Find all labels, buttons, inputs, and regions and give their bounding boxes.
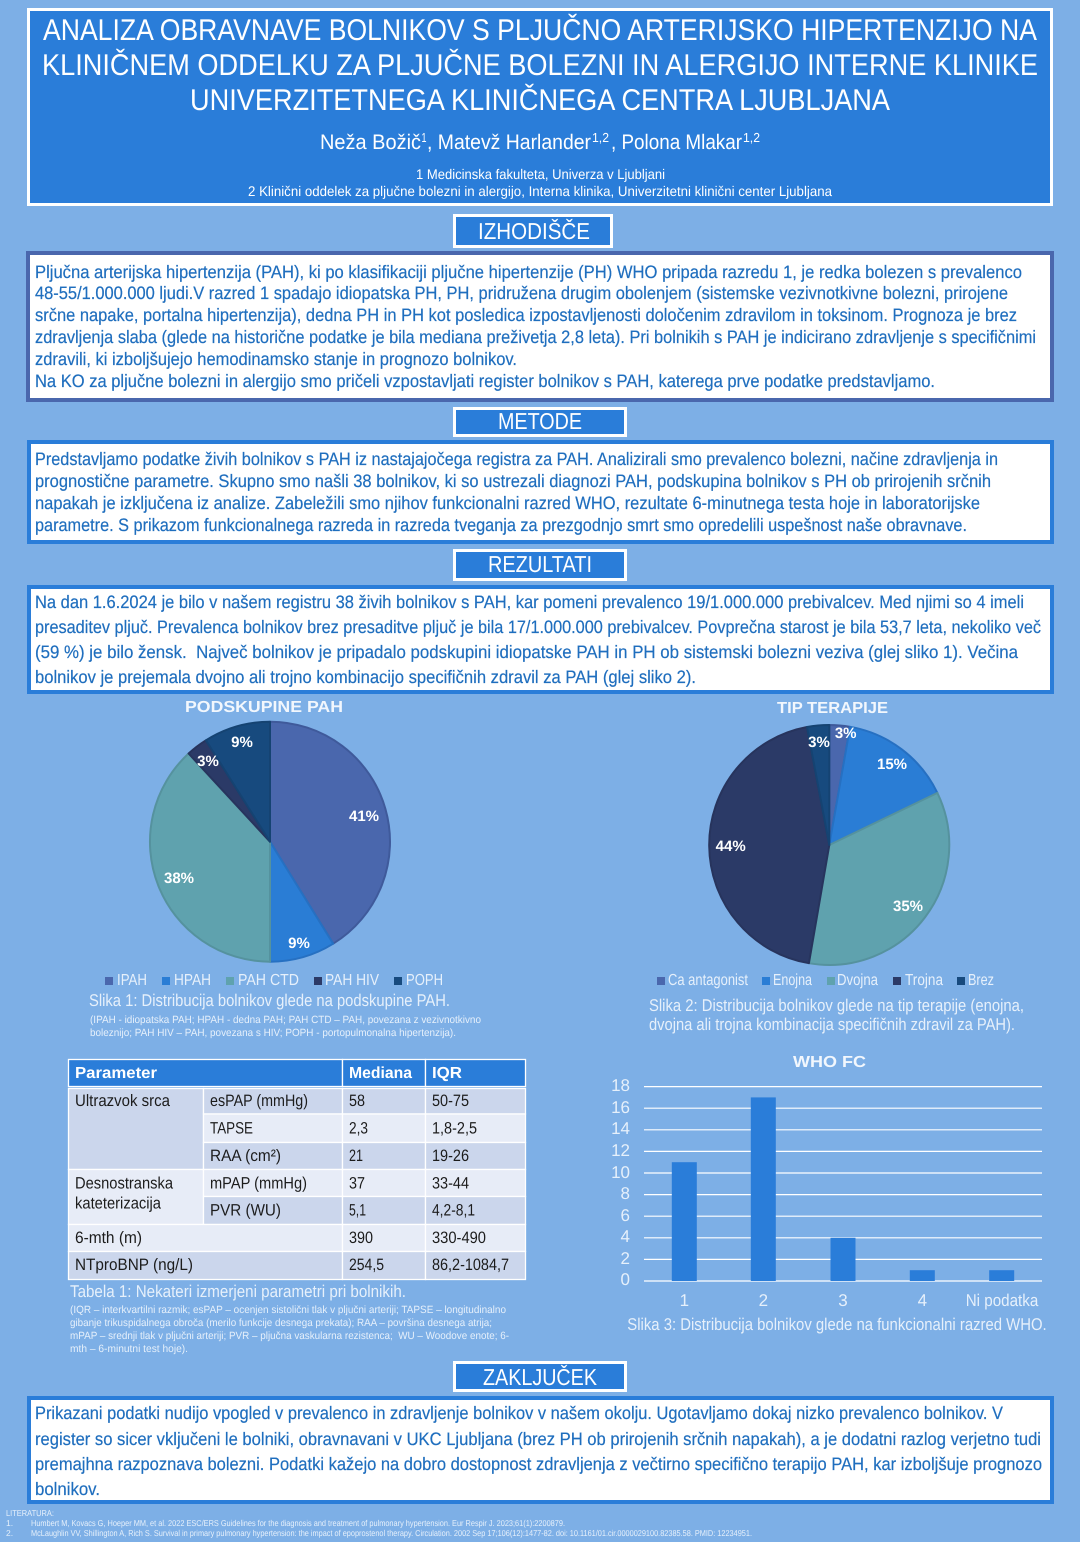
title: UNIVERZITETNEGA KLINIČNEGA CENTRA LJUBLJANA xyxy=(190,83,890,117)
table body text: 1,8-2,5 xyxy=(432,1120,477,1138)
panel: rezultati text: (59 %) je bilo žensk. Največ bolnikov je pripadalo podskupini idiopatske PAH in PH ob sistemski bolezni veziva (glej sliko 1). Večina xyxy=(35,642,1019,662)
caption: slika 1: (IPAH - idiopatska PAH; HPAH - dedna PAH; PAH CTD – PAH, povezana z vezivnotkivno xyxy=(90,1014,481,1026)
pie value labels: 44% xyxy=(716,838,746,855)
chart: WHO FC bar chart xyxy=(611,1054,1042,1310)
pie value labels: 35% xyxy=(893,898,923,915)
y axis labels: 8 xyxy=(621,1184,630,1203)
pie value labels: 41% xyxy=(349,808,379,825)
authors xyxy=(320,130,760,154)
pie legend: IPAH xyxy=(117,972,147,989)
panel: metode text xyxy=(29,442,1052,542)
bars xyxy=(672,1097,1014,1281)
pie legend: Ca antagonist xyxy=(668,972,748,989)
x axis labels: 1 xyxy=(680,1291,689,1310)
table header text: IQR xyxy=(432,1065,462,1082)
affiliations: 1 Medicinska fakulteta, Univerza v Ljubljani xyxy=(416,166,665,182)
pie legend: PAH CTD xyxy=(238,972,299,989)
pie value labels: 9% xyxy=(231,734,253,751)
caption: tabela 1: mPAP – srednji tlak v pljučni arteriji; PVR – pljučna vaskularna rezistenca; WU – Woodove enote; 6- xyxy=(70,1330,509,1342)
pie slices xyxy=(150,722,390,962)
caption: slika 1: boleznijo; PAH HIV – PAH, povezana s HIV; POPH - portopulmonalna hipertenzija). xyxy=(90,1027,456,1039)
references: Humbert M, Kovacs G, Hoeper MM, et al. 2022 ESC/ERS Guidelines for the diagnosis and treatment of pulmonary hypertension. Eur Respir J. 2023;61(1):2200879. xyxy=(31,1518,565,1528)
chart: tip terapije pie xyxy=(657,700,994,989)
table body text: TAPSE xyxy=(210,1120,253,1138)
pie legend xyxy=(657,972,994,989)
panel: rezultati text: bolnikov je prejemala dvojno ali trojno kombinacijo specifičnih zdravil za PAH (glej sliko 2). xyxy=(35,667,696,687)
table header text: Mediana xyxy=(349,1065,412,1082)
table body text: NTproBNP (ng/L) xyxy=(75,1256,193,1274)
panel: izhodišče text: Pljučna arterijska hipertenzija (PAH), ki po klasifikaciji pljučne hipertenzije (PH) WHO pripada razredu 1, je redka bolezen s prevalenco xyxy=(35,262,1022,282)
x axis labels: 4 xyxy=(918,1291,927,1310)
pie value labels: 38% xyxy=(164,870,194,887)
pie legend xyxy=(105,972,443,989)
table body text: 6-mth (m) xyxy=(75,1229,142,1247)
pie legend: Trojna xyxy=(905,972,943,989)
table body text: 19-26 xyxy=(432,1147,469,1165)
authors: 1 xyxy=(422,130,426,145)
heading: metode: METODE xyxy=(498,408,582,434)
table body text: 254,5 xyxy=(349,1256,384,1274)
pie value labels: 3% xyxy=(808,734,830,751)
pie value labels: 3% xyxy=(835,725,857,742)
authors: , Polona Mlakar xyxy=(611,131,742,154)
chart title: WHO FC xyxy=(793,1054,867,1071)
table cells xyxy=(68,1060,526,1280)
pie legend: Brez xyxy=(968,972,994,989)
caption: slika 1: Slika 1: Distribucija bolnikov glede na podskupine PAH. xyxy=(89,991,450,1010)
panel: zaključek text: bolnikov. xyxy=(35,1479,100,1499)
heading: rezultati xyxy=(454,550,626,580)
caption: slika 1 xyxy=(89,991,481,1039)
panel: rezultati text xyxy=(29,587,1052,692)
table body text: mPAP (mmHg) xyxy=(210,1174,307,1192)
references: LITERATURA: xyxy=(6,1508,54,1518)
panel: metode text: prognostične parametre. Skupno smo našli 38 bolnikov, ki so ustrezali diagnozi PAH, podskupina bolnikov s PH ob prirojenih srčnih xyxy=(35,471,991,491)
references: 1. xyxy=(6,1518,13,1528)
pie value labels xyxy=(164,734,379,952)
panel: izhodišče text xyxy=(28,253,1052,400)
table body text: 50-75 xyxy=(432,1092,469,1110)
table body text: 37 xyxy=(349,1174,365,1192)
caption: tabela 1 xyxy=(70,1282,509,1355)
table body text: 390 xyxy=(349,1229,373,1247)
table body text: PVR (WU) xyxy=(210,1202,281,1220)
y axis labels: 10 xyxy=(611,1163,630,1182)
table header text xyxy=(75,1065,462,1082)
heading: rezultati: REZULTATI xyxy=(488,551,592,577)
caption: slika 2 xyxy=(649,996,1024,1034)
pie value labels: 9% xyxy=(288,935,310,952)
panel: zaključek text xyxy=(29,1398,1052,1502)
table body text: esPAP (mmHg) xyxy=(210,1092,308,1110)
table body text: 33-44 xyxy=(432,1174,469,1192)
panel: zaključek text: Prikazani podatki nudijo vpogled v prevalenco in zdravljenje bolnikov v našem okolju. Ugotavljamo dokaj nizko prevalenco bolnikov. V xyxy=(35,1403,1003,1423)
pie legend: PAH HIV xyxy=(325,972,379,989)
references: McLaughlin VV, Shillington A, Rich S. Survival in primary pulmonary hypertension: the impact of epoprostenol therapy. Circulation. 2002 Sep 17;106(12):1477-82. doi: 10.1161/01.cir.0000029100.82385.58. PMID: 12234951. xyxy=(31,1528,752,1538)
authors: , Matevž Harlander xyxy=(427,131,591,154)
pie value labels: 15% xyxy=(877,756,907,773)
pie value labels xyxy=(716,725,923,915)
table body text: Desnostranska xyxy=(75,1174,174,1192)
panel: metode text: napakah je izključena iz analize. Zabeležili smo njihov funkcionalni razred WHO, rezultate 6-minutnega testa hoje in laboratorijske xyxy=(35,493,980,513)
panel: metode text: parametre. S prikazom funkcionalnega razreda in razreda tveganja za prezgodnjo smrt smo opredelili uspešnost naše obravnave. xyxy=(35,515,967,535)
x axis labels xyxy=(680,1291,1039,1310)
pie legend: Dvojna xyxy=(837,972,878,989)
heading: izhodišče xyxy=(454,216,612,246)
y axis labels: 2 xyxy=(621,1249,630,1268)
y axis labels: 12 xyxy=(611,1141,630,1160)
authors: 1,2 xyxy=(743,130,760,145)
panel: izhodišče text: srčne napake, portalna hipertenzija), dedna PH in PH kot posledica izpostavljenosti določenim zdravilom in toksinom. Prognoza je brez xyxy=(35,305,1017,325)
table header text: Parameter xyxy=(75,1065,157,1082)
affiliations xyxy=(248,166,832,199)
y axis labels xyxy=(611,1076,630,1289)
panel: izhodišče text: 48-55/1.000.000 ljudi.V razred 1 spadajo idiopatska PH, PH, pridružena drugim obolenjem (sistemske vezivnotkivne bolezni, prirojene xyxy=(35,283,1008,303)
x axis labels: 3 xyxy=(838,1291,848,1310)
title banner xyxy=(28,10,1052,204)
x axis labels: 2 xyxy=(759,1291,768,1310)
table body text: 86,2-1084,7 xyxy=(432,1256,509,1274)
caption: slika 2: dvojna ali trojna kombinacija specifičnih zdravil za PAH). xyxy=(649,1015,1015,1034)
pie value labels: 3% xyxy=(197,753,219,770)
panel: metode text: Predstavljamo podatke živih bolnikov s PAH iz nastajajočega registra za PAH. Analizirali smo prevalenco bolezni, načine zdravljenja in xyxy=(35,449,998,469)
pie legend: POPH xyxy=(406,972,443,989)
panel: izhodišče text: zdravili, ki izboljšujejo hemodinamsko stanje in prognozo bolnikov. xyxy=(35,349,517,369)
authors: 1,2 xyxy=(592,130,609,145)
table body text: 5,1 xyxy=(349,1202,366,1220)
table body text: 58 xyxy=(349,1092,365,1110)
chart title: TIP TERAPIJE xyxy=(777,700,888,717)
pie legend: HPAH xyxy=(174,972,211,989)
chart title: PODSKUPINE PAH xyxy=(185,699,343,716)
heading: zaključek: ZAKLJUČEK xyxy=(483,1364,598,1390)
caption: tabela 1: (IQR – interkvartilni razmik; esPAP – ocenjen sistolični tlak v pljučni arteriji; TAPSE – longitudinalno xyxy=(70,1304,506,1316)
y axis labels: 18 xyxy=(611,1076,630,1095)
x axis labels: Ni podatka xyxy=(966,1291,1039,1310)
title xyxy=(42,13,1038,117)
heading: metode xyxy=(454,408,626,436)
heading: izhodišče: IZHODIŠČE xyxy=(478,218,590,244)
pie slices xyxy=(709,725,949,965)
table body text: Ultrazvok srca xyxy=(75,1092,171,1110)
authors: Neža Božič xyxy=(320,131,421,154)
affiliations: 2 Klinični oddelek za pljučne bolezni in alergijo, Interna klinika, Univerzitetni klinični center Ljubljana xyxy=(248,183,832,199)
panel: izhodišče text: Na KO za pljučne bolezni in alergijo smo pričeli vzpostavljati register bolnikov s PAH, katerega prve podatke predstavljamo. xyxy=(35,371,935,391)
table: measured parameters xyxy=(68,1060,526,1280)
y axis labels: 14 xyxy=(611,1119,630,1138)
caption: slika 2: Slika 2: Distribucija bolnikov glede na tip terapije (enojna, xyxy=(649,996,1024,1015)
y axis labels: 16 xyxy=(611,1098,630,1117)
references xyxy=(6,1508,752,1538)
table body text: kateterizacija xyxy=(75,1194,162,1212)
pie legend: Enojna xyxy=(773,972,812,989)
caption: tabela 1: Tabela 1: Nekateri izmerjeni parametri pri bolnikih. xyxy=(70,1282,406,1301)
chart: podskupine PAH pie xyxy=(105,699,443,989)
y axis labels: 4 xyxy=(621,1227,630,1246)
table body text xyxy=(75,1092,509,1274)
y axis labels: 0 xyxy=(621,1270,630,1289)
caption: tabela 1: gibanje trikuspidalnega obroča (merilo funkcije desnega prekata); RAA – površina desnega atrija; xyxy=(70,1317,492,1329)
caption: tabela 1: mth – 6-minutni test hoje). xyxy=(70,1343,188,1355)
table body text: 330-490 xyxy=(432,1229,486,1247)
references: 2. xyxy=(6,1528,13,1538)
table body text: 2,3 xyxy=(349,1120,368,1138)
table body text: RAA (cm²) xyxy=(210,1147,281,1165)
y axis labels: 6 xyxy=(621,1206,630,1225)
table body text: 21 xyxy=(349,1147,363,1165)
table body text: 4,2-8,1 xyxy=(432,1202,475,1220)
